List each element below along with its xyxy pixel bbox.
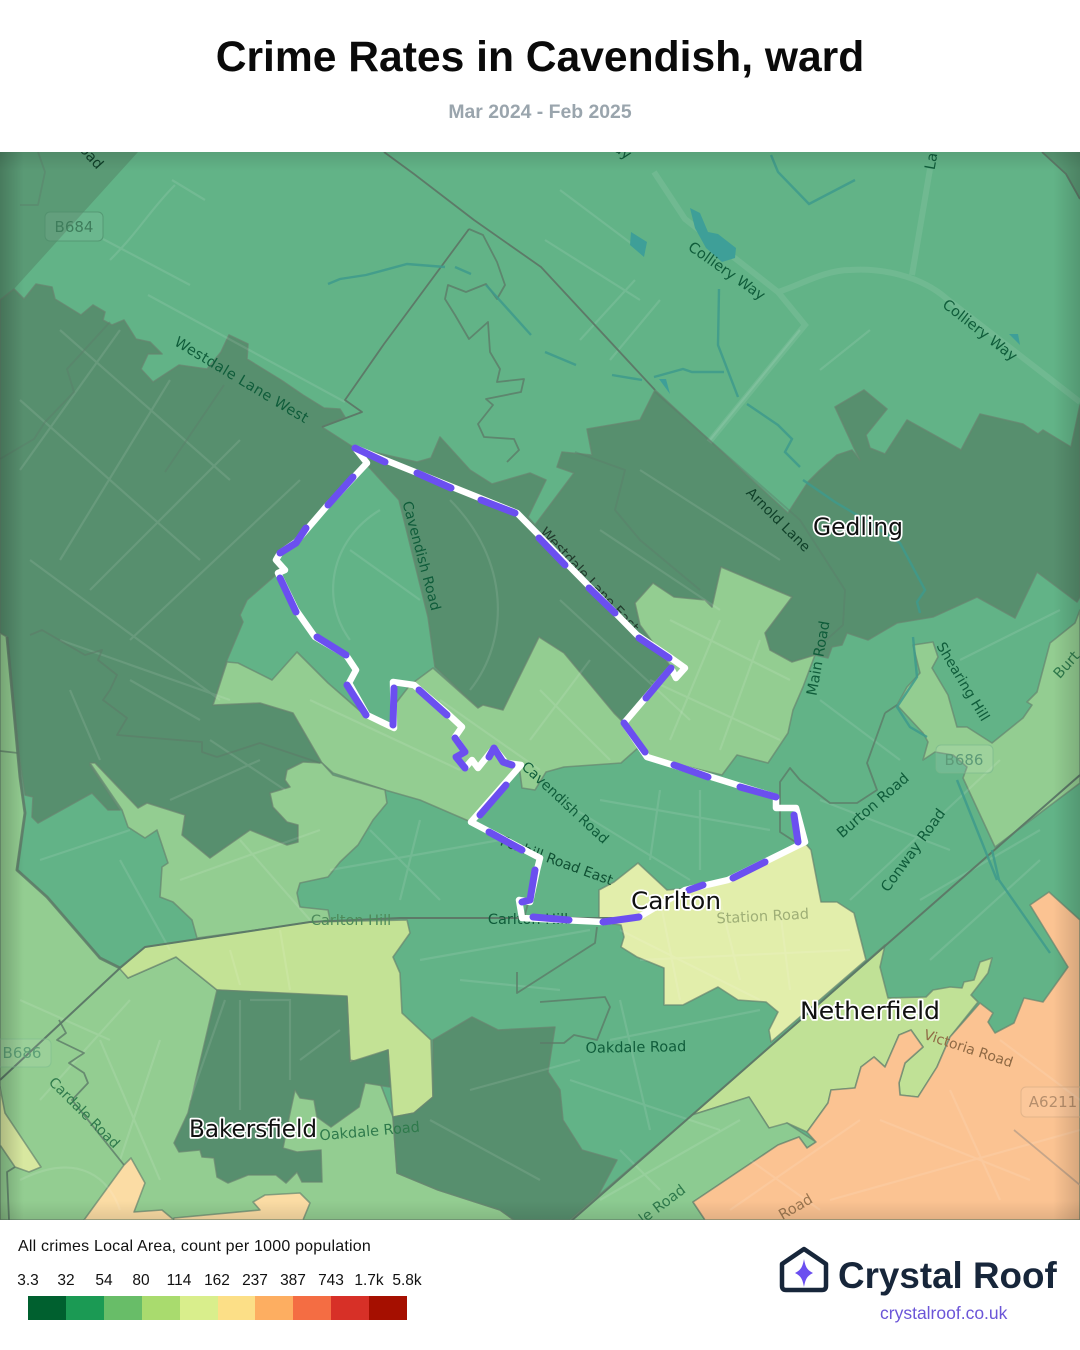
town: Carlton: Carlton [631,887,721,915]
label: Carlton Hill west: Carlton Hill [311,913,391,929]
logo url: crystalroof.co.uk [880,1303,1007,1323]
boundary white casing [276,448,805,922]
area: north-east corner [1042,152,1080,199]
area: Oakdale dark [393,1017,617,1220]
shield: B686 east: B686 [945,751,983,769]
legend: value labels: 743 [318,1272,344,1289]
boundary purple dashes [280,448,798,922]
area: east light patch [624,567,815,775]
label: Westdale Lane East: Westdale Lane East [536,525,642,636]
legend: value labels: 114 [167,1272,191,1289]
area: central, north-east and Gedling dark [355,390,1080,723]
label: Main Road: Main Road [805,620,834,697]
town labels [189,513,940,1143]
label: Burton Road: Burton Road [834,770,913,841]
area polygons [0,152,1080,1220]
label: top road fragment right: La [923,152,941,171]
label: Carlton Hill east: Carlton Hill [488,912,568,928]
subtitle: date range: Mar 2024 - Feb 2025 [448,101,632,123]
legend: value labels: 54 [95,1272,113,1289]
legend: value labels: 162 [204,1272,230,1289]
legend: value labels: 237 [242,1272,268,1289]
base map: mid green areas [0,152,1080,1220]
area: far-left yellow [0,1087,41,1172]
boundary lines [0,152,1080,1222]
label: Cavendish Road (south): Cavendish Road [518,759,611,847]
area: right light band [897,610,1080,847]
legend title: All crimes Local Area, count per 1000 population [18,1238,371,1255]
town: Bakersfield: Bakersfield [189,1115,317,1143]
shield: A6211 [1021,1087,1080,1117]
shield: B684: B684 [55,218,93,236]
label: Conway Road: Conway Road [878,806,949,895]
label: Foxhill Road East: Foxhill Road East [498,833,615,889]
area: north-west corner dark [0,152,138,300]
legend: value labels: 5.8k [392,1272,422,1289]
shield: B686 west [0,1039,51,1067]
shield: B686 west: B686 [3,1044,41,1062]
legend: value labels [17,1272,422,1289]
ward boundary: Cavendish [276,448,805,922]
area: Netherfield lime [692,945,992,1132]
label: Victoria Road: Victoria Road [922,1027,1015,1071]
label: Colliery Way west: Colliery Way [685,239,768,304]
ponds [630,208,1020,394]
area: cream south [174,1193,310,1220]
area: west-centre light [90,762,387,938]
area: Carlton yellow [599,843,866,1042]
road shields [0,212,1080,1117]
shield: A6211: A6211 [1029,1093,1077,1111]
major roads [654,169,1080,442]
legend: value labels: 3.3 [17,1272,39,1289]
area: south-west light [0,633,514,1220]
area: west dark [0,284,367,858]
legend: value labels: 32 [57,1272,75,1289]
legend: value labels: 387 [280,1272,306,1289]
legend: value labels: 1.7k [354,1272,384,1289]
area: Carlton Hill lime [119,920,433,1117]
map edge shading [0,152,1080,1220]
shield: B684 [45,212,103,241]
area: south light wedge [570,1097,816,1220]
area: central light band [213,637,639,822]
label: Oakdale Road west: Oakdale Road [319,1120,421,1144]
town: Gedling: Gedling [813,513,903,541]
label: Cardale Road: Cardale Road [45,1074,123,1152]
label: Oakdale Road east: Oakdale Road [585,1039,686,1057]
road labels [45,140,1080,1227]
area: Victoria orange [693,892,1080,1220]
legend: value labels: 80 [132,1272,150,1289]
area: Bakersfield dark [174,990,390,1183]
label: Cavendish Road (north): Cavendish Road [399,499,443,612]
choropleth map [0,152,1080,1220]
icon: Crystal Roof house logo [780,1246,828,1292]
label: Westdale Lane West: Westdale Lane West [171,334,311,427]
town: Netherfield: Netherfield [800,997,940,1025]
label: Station Road: Station Road [716,907,809,927]
shield: B686 east [936,745,993,773]
minor road network [20,180,1080,1210]
label: Arnold Lane: Arnold Lane [743,485,813,555]
legend: colour scale [28,1296,407,1320]
logo wordmark: Crystal Roof [838,1255,1057,1296]
label: Colliery Way east: Colliery Way [939,297,1020,365]
title: Crime Rates in Cavendish, ward [216,33,864,81]
label: Shearing Hill: Shearing Hill [933,640,992,724]
waterways [328,155,1050,953]
area: cream south-west [84,1158,174,1220]
